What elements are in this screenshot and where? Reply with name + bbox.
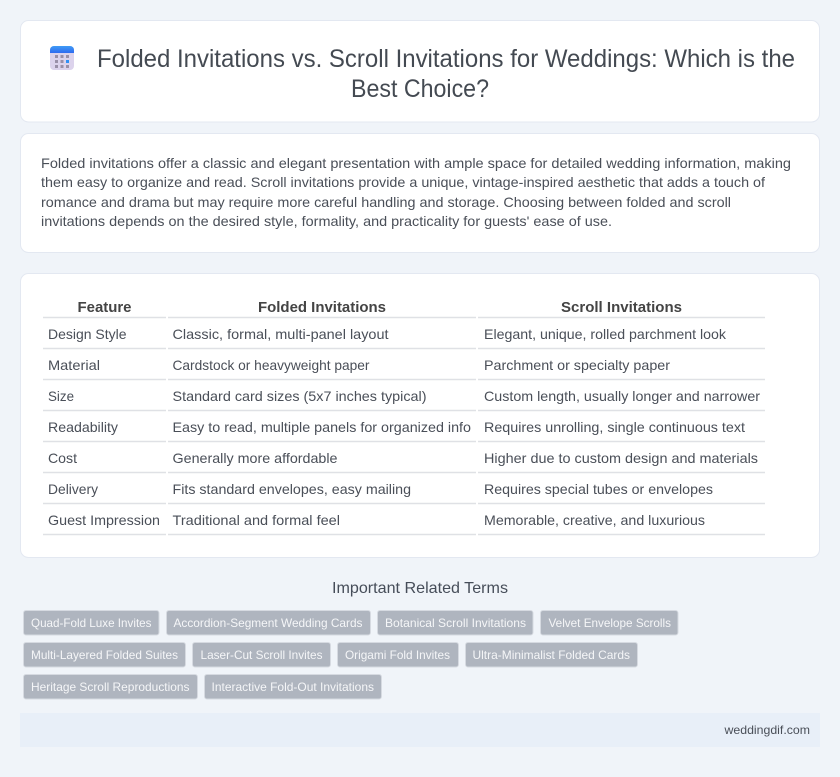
table row: readability: Easy to read, multiple panels for organized info — [172, 419, 471, 435]
table row: design style: Classic, formal, multi-panel layout — [172, 326, 389, 342]
heading: important related terms: Important Related Terms — [332, 580, 508, 597]
tag — [540, 610, 678, 635]
table row: cost: Higher due to custom design and materials — [484, 450, 758, 466]
footer: weddingdif.com — [723, 723, 810, 737]
table row: delivery: Delivery — [48, 481, 98, 497]
tag: Multi-Layered Folded Suites — [31, 648, 178, 662]
icon: calendar — [50, 46, 74, 70]
table row: design style — [48, 326, 727, 342]
table row: guest impression: Guest Impression — [48, 512, 160, 528]
panel: header — [20, 20, 820, 122]
table row: material — [48, 357, 670, 373]
table row: material: Cardstock or heavyweight paper — [172, 357, 370, 373]
text block: introduction: Folded invitations offer a classic and elegant presentation with ample space for detailed wedding information, making — [41, 155, 791, 171]
table row: delivery — [48, 481, 713, 497]
table row: guest impression — [48, 512, 705, 528]
table row: cost: Cost — [48, 450, 77, 466]
table row: delivery: Requires special tubes or envelopes — [484, 481, 713, 497]
tag — [466, 642, 638, 667]
table row: design style: Design Style — [48, 326, 127, 342]
table row: size — [48, 388, 760, 404]
tag: Laser-Cut Scroll Invites — [200, 648, 322, 662]
tag: Interactive Fold-Out Invitations — [212, 680, 374, 694]
tag — [166, 610, 370, 635]
table row: cost — [48, 450, 758, 466]
panel: comparison table — [20, 274, 820, 558]
tag: Accordion-Segment Wedding Cards — [174, 616, 362, 630]
tag — [192, 642, 330, 667]
title: Folded Invitations vs. Scroll Invitations for Weddings: Which is the — [97, 45, 795, 73]
table row: material: Parchment or specialty paper — [484, 357, 670, 373]
table row: design style: Elegant, unique, rolled parchment look — [484, 326, 727, 342]
table row: delivery: Fits standard envelopes, easy mailing — [172, 481, 411, 497]
text block: introduction: romance and drama but may require more careful handling and storage. Choosing between folded and scroll — [41, 194, 731, 210]
table row: size: Size — [48, 388, 74, 404]
table row: guest impression: Traditional and formal feel — [172, 512, 340, 528]
table row: readability — [48, 419, 745, 435]
table row: material: Material — [48, 357, 100, 373]
panel: introduction — [20, 134, 820, 252]
tag: Botanical Scroll Invitations — [385, 616, 526, 630]
panel: related term tags — [24, 610, 678, 699]
tag — [378, 610, 533, 635]
tag — [24, 642, 186, 667]
tag — [24, 674, 198, 699]
tag: Heritage Scroll Reproductions — [31, 680, 190, 694]
table row: readability: Readability — [48, 419, 118, 435]
table row: readability: Requires unrolling, single continuous text — [484, 419, 745, 435]
tag: Ultra-Minimalist Folded Cards — [472, 648, 630, 662]
table header: Folded Invitations — [258, 299, 386, 316]
tag: Origami Fold Invites — [345, 648, 450, 662]
table header — [78, 299, 682, 316]
table header: Feature — [78, 299, 132, 316]
text block: introduction: invitations depends on the desired style, formality, and practicality for guests' ease of use. — [41, 213, 612, 229]
footer — [20, 713, 820, 747]
text block: introduction: them easy to organize and read. Scroll invitations provide a unique, vintage-inspired aesthetic that adds a touch of — [41, 174, 765, 190]
table row: cost: Generally more affordable — [172, 450, 338, 466]
tag — [204, 674, 382, 699]
table row: size: Custom length, usually longer and narrower — [484, 388, 760, 404]
tag: Velvet Envelope Scrolls — [548, 616, 671, 630]
table row: size: Standard card sizes (5x7 inches typical) — [172, 388, 426, 404]
tag: Quad-Fold Luxe Invites — [31, 616, 152, 630]
table row: guest impression: Memorable, creative, and luxurious — [484, 512, 705, 528]
tag — [24, 610, 159, 635]
title: Best Choice? — [351, 75, 489, 103]
tag — [338, 642, 458, 667]
table header: Scroll Invitations — [561, 299, 682, 316]
